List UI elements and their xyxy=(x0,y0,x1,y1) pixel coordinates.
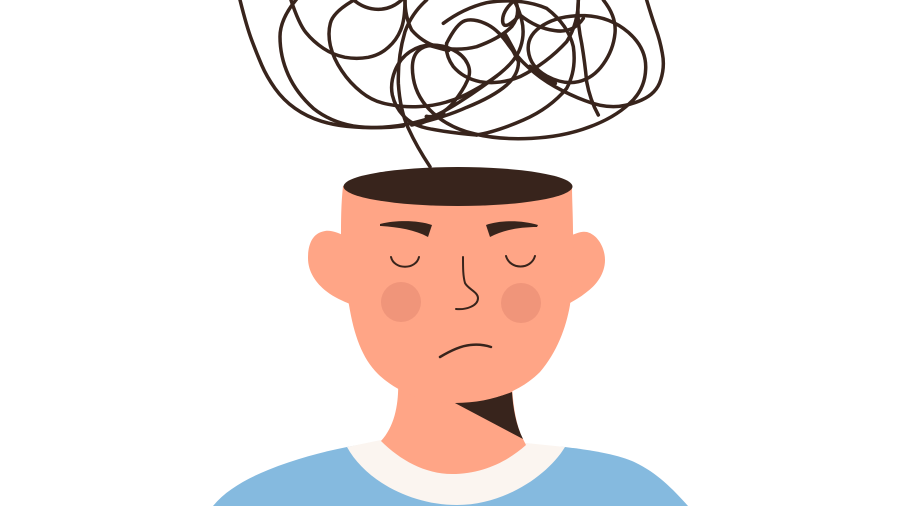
mouth xyxy=(440,345,491,357)
right cheek xyxy=(501,283,541,323)
shirt xyxy=(213,441,688,506)
left ear xyxy=(308,231,350,304)
open head cavity xyxy=(344,167,572,206)
neck xyxy=(381,380,526,474)
right closed eye xyxy=(506,256,535,266)
left cheek xyxy=(381,282,421,322)
right ear xyxy=(570,232,605,303)
neck shadow xyxy=(453,392,523,439)
left closed eye xyxy=(391,257,419,267)
right eyebrow xyxy=(486,221,538,237)
left eyebrow xyxy=(380,221,432,237)
tangled scribble of thoughts xyxy=(240,0,663,167)
face xyxy=(341,186,573,403)
nose xyxy=(456,257,478,309)
shirt collar xyxy=(347,440,565,505)
